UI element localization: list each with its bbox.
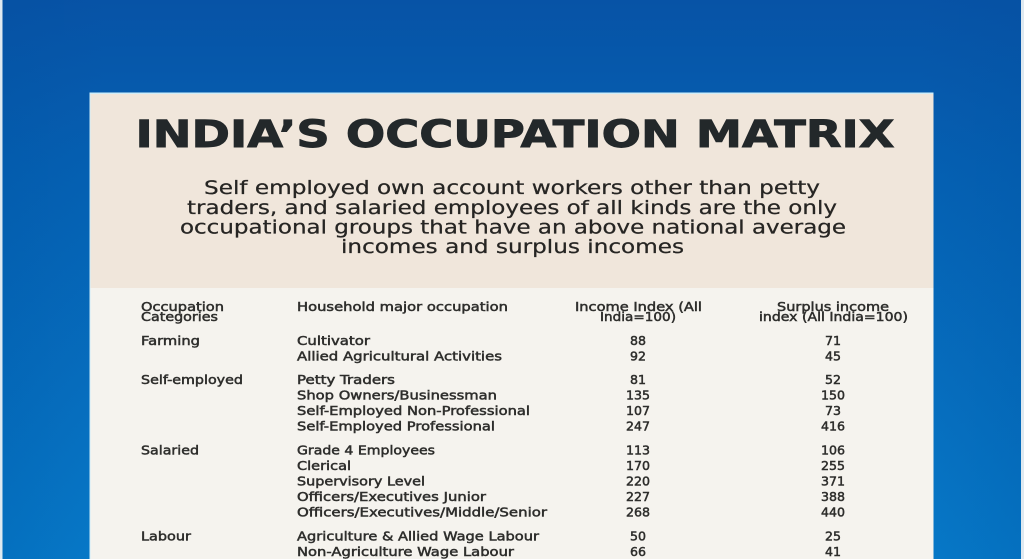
table group: self-employed: Self-Employed Professional [297,418,495,434]
table header row [141,299,908,324]
table group: labour: 66 [630,544,646,559]
table group: salaried: Clerical [297,458,351,473]
table group: salaried: Grade 4 Employees [297,442,435,458]
title: INDIA’S OCCUPATION MATRIX [136,113,894,156]
table group: self-employed: 247 [626,418,650,434]
table group: self-employed [141,372,845,434]
subtitle text block: incomes and surplus incomes [341,236,684,258]
table group: farming: 71 [825,333,841,348]
table group: farming: 88 [630,333,646,348]
table header row: Categories [141,309,218,324]
table group: salaried: 220 [626,474,650,488]
table group: salaried: 106 [821,442,845,458]
table group: salaried: 388 [821,489,845,504]
table header row: Occupation [141,299,224,314]
subtitle text block [180,177,846,258]
table group: salaried: 113 [626,442,650,458]
panel: table body [90,288,934,559]
table header row: Income Index (All [575,299,702,314]
table group: self-employed: Shop Owners/Businessman [297,388,497,402]
table group: salaried: 440 [821,504,845,520]
table group: labour: 50 [630,528,646,544]
table group: farming: 45 [825,348,841,364]
table group: self-employed: 52 [825,372,841,387]
table header row: index (All India=100) [759,309,908,324]
table group: labour: 25 [825,528,841,544]
table group: farming: Cultivator [297,333,371,348]
table group: labour: 41 [825,544,841,559]
table group: labour [141,528,841,559]
table group: self-employed: 81 [630,372,646,387]
subtitle text block: traders, and salaried employees of all kinds are the only [187,197,837,219]
table group: farming: Allied Agricultural Activities [297,348,502,364]
table header row: Surplus income [777,299,889,314]
table group: self-employed: 135 [626,388,650,402]
table header row: Household major occupation [297,299,508,314]
panel: header band [90,94,934,288]
subtitle text block: Self employed own account workers other than petty [204,177,820,199]
table group: labour: Agriculture & Allied Wage Labour [297,528,540,544]
table group: farming: 92 [630,348,646,364]
table group: self-employed: 150 [821,388,845,402]
table group: self-employed: 107 [626,403,650,418]
table group: self-employed: 416 [821,418,845,434]
table group: self-employed: Self-employed [141,372,243,387]
table group: self-employed: 73 [825,403,841,418]
table group: salaried: 170 [626,458,650,473]
table group: labour: Non-Agriculture Wage Labour [297,544,515,559]
table group: salaried: 255 [821,458,845,473]
table group: salaried: Officers/Executives Junior [297,489,487,504]
table group: salaried: 268 [626,504,650,520]
subtitle text block: occupational groups that have an above national average [180,216,846,238]
table group: farming [141,333,841,364]
table group: salaried: 371 [821,474,845,488]
table group: salaried [141,442,845,520]
table group: labour: Labour [141,528,192,544]
table header row: India=100) [600,309,676,324]
table group: salaried: Supervisory Level [297,474,425,488]
panel: matrix card [90,92,934,559]
table group: farming: Farming [141,333,200,348]
table group: salaried: Officers/Executives/Middle/Senior [297,504,548,520]
table group: self-employed: Self-Employed Non-Professional [297,403,530,418]
table group: self-employed: Petty Traders [297,372,395,387]
table group: salaried: Salaried [141,442,199,458]
table group: salaried: 227 [626,489,650,504]
